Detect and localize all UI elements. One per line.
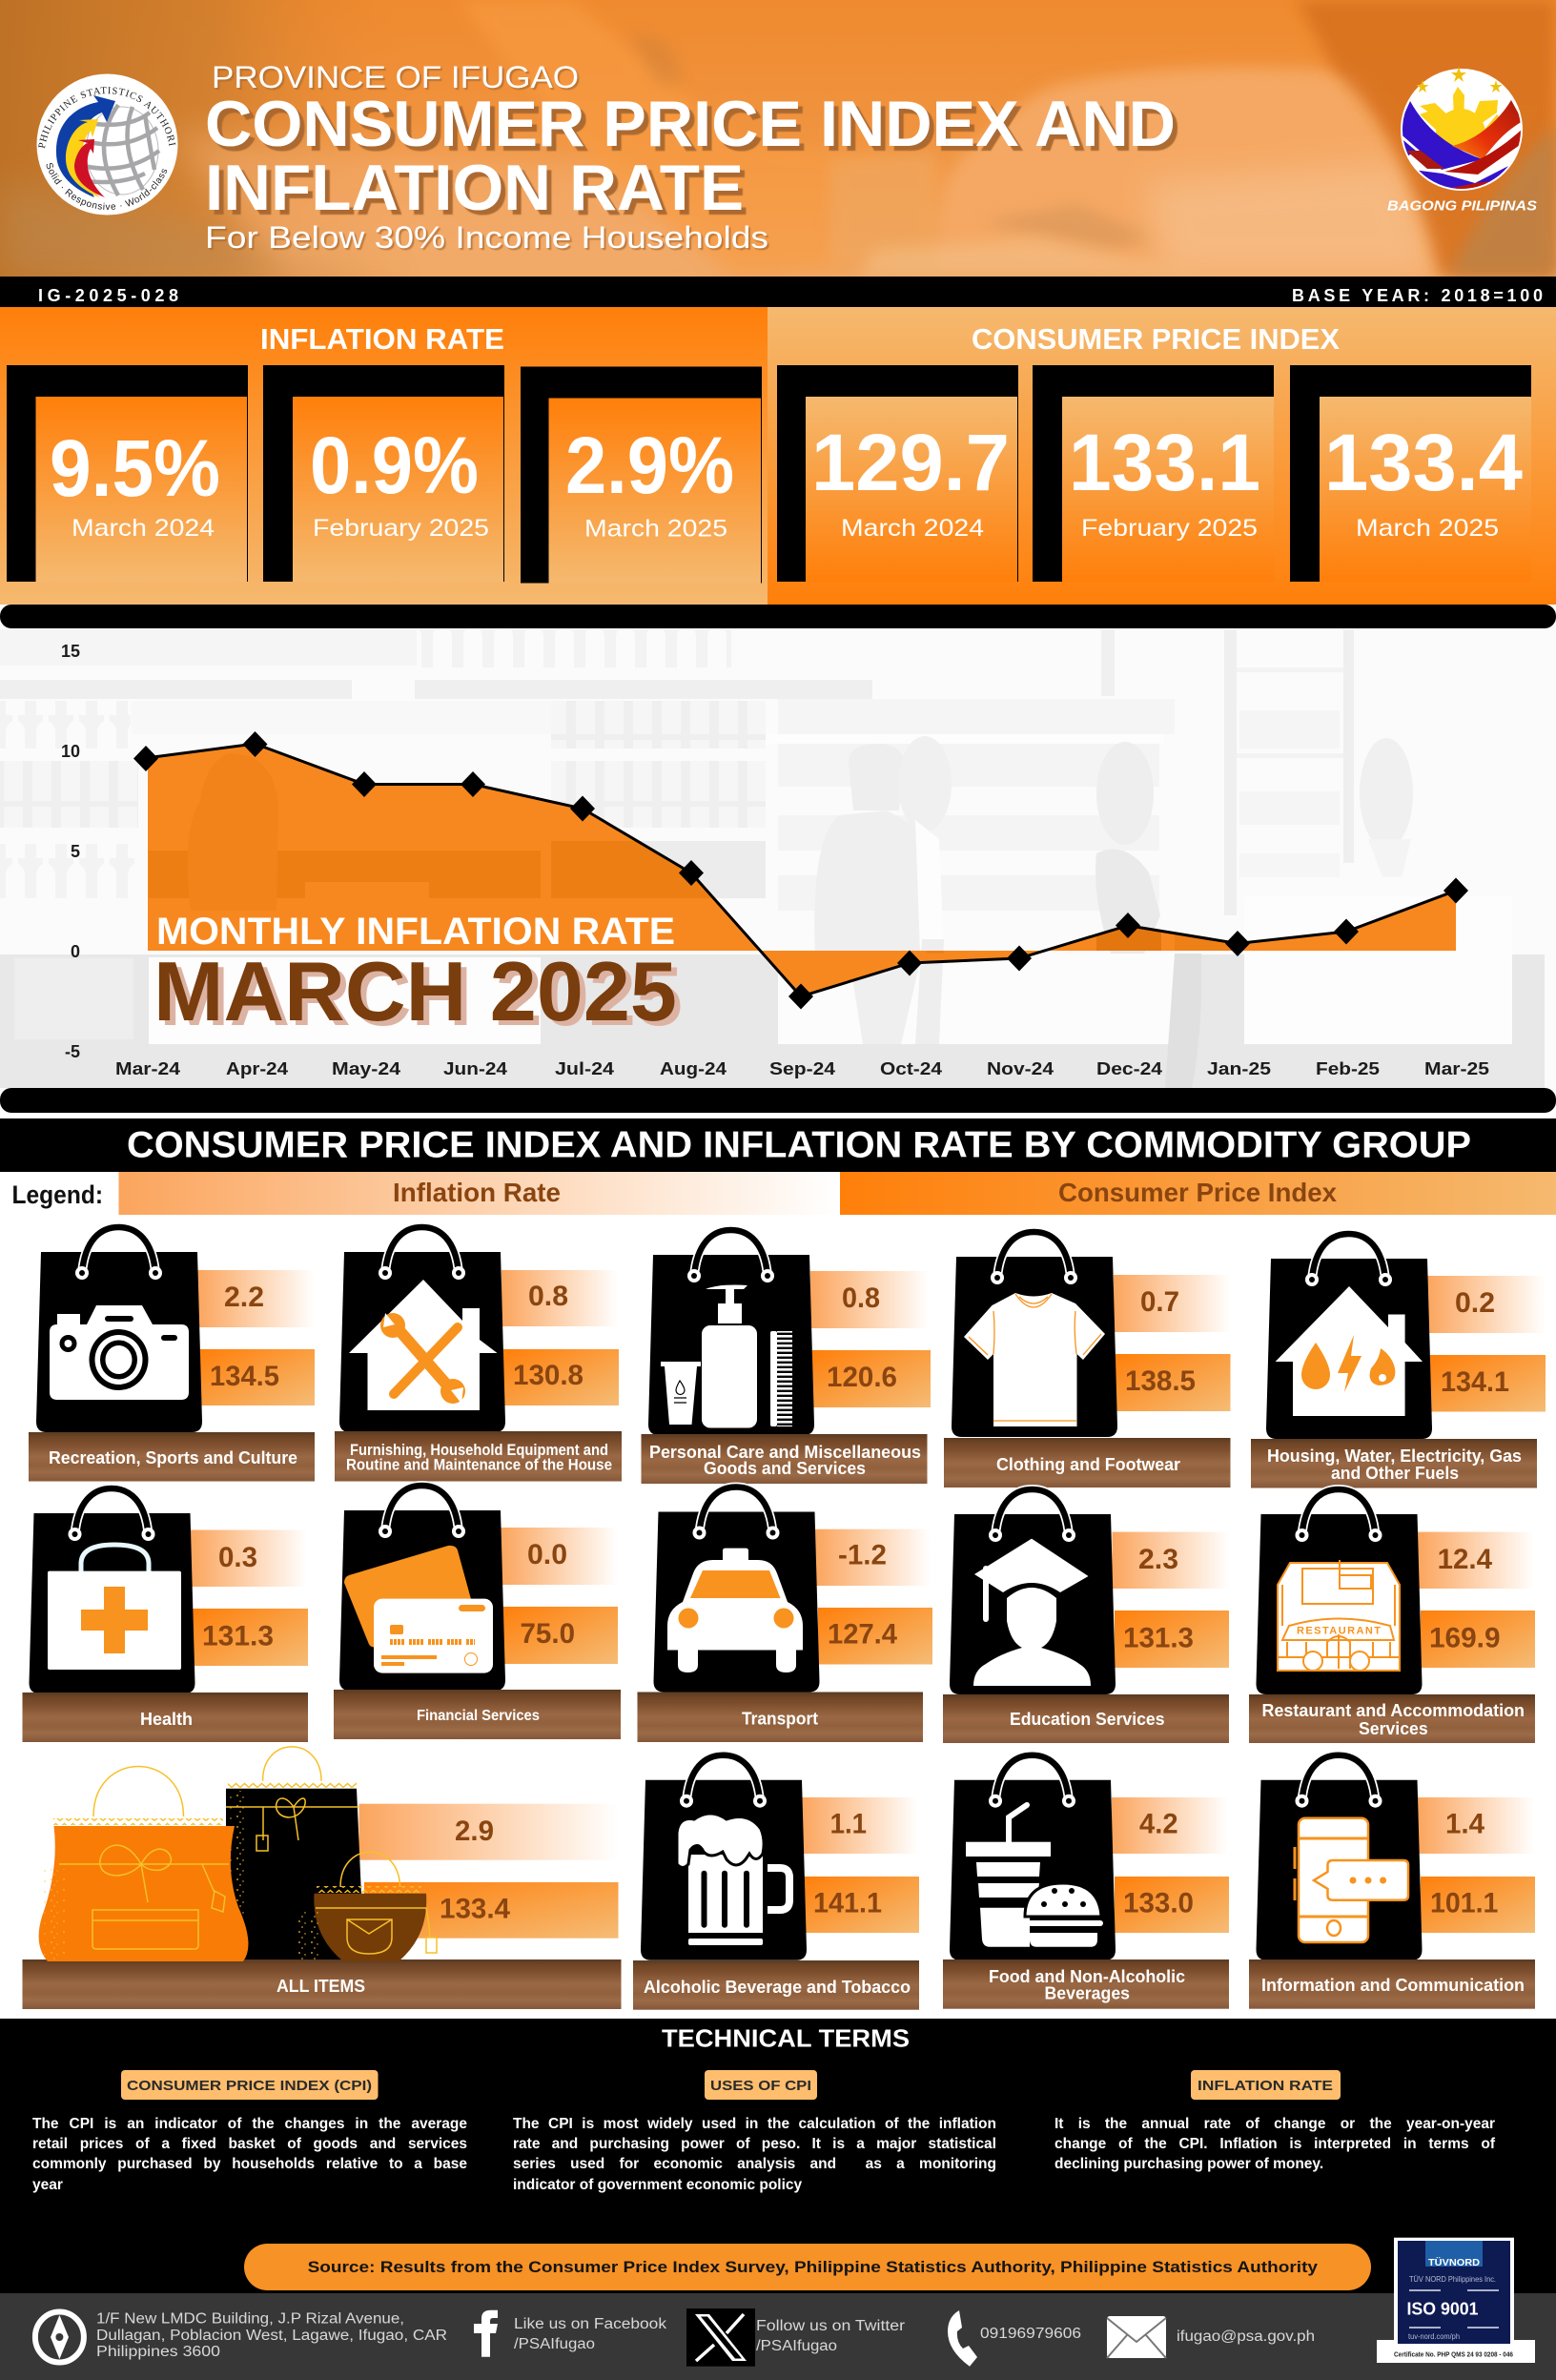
- right shelves: [1101, 629, 1115, 696]
- item: financial services: 0.0: [527, 1539, 567, 1570]
- item: food and non-alcoholic beverages: [943, 1755, 1229, 2009]
- item: furnishing, household equipment: 0.8: [528, 1281, 568, 1312]
- item: housing, water, electricity: Housing, Water, Electricity, Gas: [1267, 1446, 1522, 1466]
- y axis: 0: [71, 942, 80, 961]
- item: furnishing, household equipment: 130.8: [513, 1360, 584, 1391]
- x axis: Jun-24: [443, 1059, 507, 1078]
- item: restaurant and accommodation: Restaurant and Accommodation: [1262, 1700, 1525, 1720]
- term label: CPI: [121, 2070, 378, 2100]
- card: March 2025: March 2025: [1356, 515, 1499, 542]
- card: March 2024: 129.7: [811, 418, 1010, 507]
- card: March 2024: 9.5%: [50, 423, 220, 513]
- heading: CONSUMER PRICE INDEX: [972, 322, 1340, 356]
- y axis: 15: [61, 642, 80, 661]
- icon: camera: [50, 1305, 189, 1400]
- item: personal care: Personal Care and Miscellaneous: [649, 1442, 921, 1462]
- item: information and communication: 1.4: [1445, 1809, 1484, 1840]
- panel: inflation rate: [0, 307, 768, 605]
- text: CPI definition: The CPI is an indicator of the changes in the average: [32, 2116, 467, 2132]
- item: recreation, sports and culture: Recreation, Sports and Culture: [49, 1447, 297, 1467]
- y axis: 5: [71, 842, 80, 861]
- icon: taxi: [667, 1549, 803, 1672]
- contact: facebook: [474, 2310, 666, 2357]
- term label: uses of CPI: USES OF CPI: [710, 2078, 811, 2094]
- card: March 2025: 2.9%: [565, 421, 734, 510]
- y axis: 10: [61, 742, 80, 761]
- store background behind chart: [0, 625, 1556, 1092]
- white counters: [149, 957, 541, 1044]
- card: March 2025: [1290, 365, 1531, 582]
- footer band: [0, 2293, 1556, 2380]
- text: uses of CPI: rate and purchasing power of peso. It is a major statistical: [513, 2136, 996, 2152]
- x axis: Mar-24: [115, 1059, 180, 1078]
- card: February 2025: 133.1: [1069, 418, 1260, 507]
- icon: graduate: [973, 1539, 1091, 1686]
- logo: Philippine Statistics Authority: Solid · Responsive · World-class: [46, 162, 168, 210]
- text: uses of CPI: [513, 2116, 996, 2193]
- heading: TECHNICAL TERMS: [662, 2023, 910, 2052]
- item: education services: 2.3: [1138, 1544, 1178, 1575]
- legend: consumer price index: [840, 1172, 1556, 1215]
- item: recreation, sports and culture: 2.2: [224, 1282, 264, 1313]
- x axis: Apr-24: [226, 1059, 288, 1078]
- contact: email: [1107, 2316, 1315, 2358]
- term label: inflation rate: [1191, 2070, 1341, 2100]
- icon: t-shirt: [964, 1293, 1105, 1426]
- top shelf: [0, 629, 417, 666]
- text: uses of CPI: The CPI is most widely used in the calculation of the inflation: [513, 2116, 996, 2132]
- icon: phone: [948, 2310, 977, 2367]
- item: education services: [943, 1489, 1229, 1743]
- icon: beer mug: [677, 1814, 789, 1945]
- legend: inflation rate: Inflation Rate: [393, 1178, 561, 1207]
- item: furnishing, household equipment: Furnishing, Household Equipment and: [350, 1442, 608, 1459]
- item: personal care: Goods and Services: [704, 1458, 866, 1478]
- text: inflation rate definition: declining purchasing power of money.: [1054, 2156, 1323, 2172]
- item: restaurant and accommodation: 169.9: [1429, 1623, 1501, 1654]
- text: CPI definition: year: [32, 2177, 63, 2193]
- item: personal care: 0.8: [842, 1282, 880, 1314]
- card: March 2025: 133.4: [1324, 418, 1523, 507]
- y axis: -5: [65, 1042, 80, 1061]
- item: transport: 127.4: [828, 1619, 897, 1650]
- item: restaurant and accommodation: 12.4: [1438, 1544, 1492, 1575]
- legend: consumer price index: Consumer Price Index: [1058, 1178, 1337, 1207]
- title block: [205, 60, 1176, 255]
- item: health: 131.3: [202, 1621, 274, 1652]
- item: information and communication: Information and Communication: [1261, 1975, 1525, 1995]
- text: uses of CPI: indicator of government economic policy: [513, 2177, 802, 2193]
- source pill: Source: Results from the Consumer Price Index Survey, Philippine Statistics Authority, Philippine Statistics Authority: [308, 2258, 1319, 2276]
- item: alcoholic beverage and tobacco: 1.1: [830, 1809, 867, 1840]
- item: all items: 133.4: [440, 1894, 510, 1925]
- divider bars: [0, 605, 1556, 1113]
- contact: facebook: /PSAIfugao: [514, 2336, 595, 2352]
- contact: twitter: Follow us on Twitter: [756, 2318, 905, 2334]
- text: uses of CPI: series used for economic analysis and as a monitoring: [513, 2156, 996, 2172]
- icon: house with tools: [349, 1280, 498, 1410]
- item: health: 0.3: [218, 1542, 257, 1573]
- panel: consumer price index: [768, 307, 1556, 605]
- badge: ISO 9001: tuv-nord.com/ph: [1408, 2332, 1460, 2341]
- item: education services: Education Services: [1010, 1709, 1165, 1729]
- main title: [205, 88, 1176, 224]
- icon: house with utilities: [1276, 1286, 1423, 1416]
- markers: [133, 731, 1468, 1009]
- card: March 2024: [777, 365, 1018, 582]
- card: February 2025: February 2025: [313, 515, 489, 542]
- contact: address: Dullagan, Poblacion West, Lagawe, Ifugao, CAR: [96, 2328, 447, 2344]
- card: March 2024: March 2024: [841, 515, 984, 542]
- term label: inflation rate: INFLATION RATE: [1198, 2078, 1333, 2094]
- left shelves: [0, 701, 131, 749]
- main title: INFLATION RATE: [205, 152, 744, 224]
- icon: black gift bag: [226, 1747, 364, 1959]
- legend: [11, 1172, 1556, 1215]
- item: recreation, sports and culture: 134.5: [210, 1361, 279, 1392]
- line and area chart: monthly inflation rate: [61, 642, 1489, 1078]
- item: recreation, sports and culture: [29, 1227, 315, 1482]
- legend: Legend:: [11, 1180, 103, 1209]
- item: information and communication: 101.1: [1430, 1888, 1498, 1919]
- item: furnishing, household equipment: Routine and Maintenance of the House: [346, 1457, 612, 1474]
- text: CPI definition: [32, 2116, 467, 2193]
- item: restaurant and accommodation: Services: [1359, 1718, 1428, 1738]
- item: transport: Transport: [742, 1709, 818, 1728]
- badge: ISO 9001: TÜVNORD: [1428, 2256, 1480, 2268]
- icon: X: [686, 2308, 755, 2367]
- central display: [778, 699, 1175, 734]
- item: financial services: Financial Services: [417, 1708, 540, 1724]
- term label: uses of CPI: [705, 2070, 817, 2100]
- contact: twitter: [686, 2308, 905, 2367]
- item: food and non-alcoholic beverages: Food and Non-Alcoholic: [989, 1966, 1185, 1986]
- item: clothing and footwear: 0.7: [1140, 1286, 1179, 1318]
- badge: ISO 9001: ISO 9001: [1407, 2300, 1478, 2319]
- icon: bank cards: [344, 1546, 493, 1673]
- x axis: Jan-25: [1207, 1059, 1271, 1078]
- heading: INFLATION RATE: [260, 322, 504, 356]
- card: March 2025: March 2025: [584, 515, 727, 542]
- reference bar: IG-2025-028: [38, 286, 178, 305]
- floor: [0, 954, 1545, 1088]
- item: clothing and footwear: Clothing and Footwear: [996, 1454, 1180, 1474]
- people: [849, 744, 904, 810]
- header banner: [0, 0, 1556, 277]
- badge: ISO 9001: [1377, 2238, 1535, 2363]
- x axis: May-24: [332, 1059, 400, 1078]
- badge: ISO 9001: TÜV NORD Philippines Inc.: [1409, 2274, 1496, 2284]
- reference bar: BASE YEAR: 2018=100: [1292, 286, 1543, 305]
- x axis: Sep-24: [769, 1059, 835, 1078]
- icon: compass: [35, 2311, 84, 2363]
- panel: technical terms: [0, 2019, 1556, 2293]
- chart title: monthly inflation rate: MONTHLY INFLATION RATE: [156, 911, 675, 953]
- card: February 2025: [263, 365, 504, 582]
- x axis: Mar-25: [1424, 1059, 1489, 1078]
- text: CPI definition: retail prices of a fixed basket of goods and services: [32, 2136, 467, 2152]
- x axis: Nov-24: [987, 1059, 1054, 1078]
- stars: [1417, 67, 1503, 92]
- contact: phone: [948, 2310, 1081, 2367]
- icon: medical kit: [48, 1545, 181, 1670]
- logo: Bagong Pilipinas: [1387, 67, 1537, 214]
- item: health: [23, 1488, 308, 1742]
- middle shelves: [132, 701, 551, 734]
- icon: drink and burger: [966, 1805, 1103, 1947]
- item: alcoholic beverage and tobacco: [633, 1755, 919, 2010]
- item: clothing and footwear: 138.5: [1125, 1365, 1196, 1397]
- main title: CONSUMER PRICE INDEX AND: [205, 88, 1176, 160]
- icon: orange gift bag: [39, 1766, 248, 1961]
- x axis: Oct-24: [880, 1059, 942, 1078]
- item: furnishing, household equipment: [335, 1227, 622, 1482]
- item: personal care: 120.6: [827, 1362, 897, 1393]
- reference bar: [0, 277, 1556, 307]
- contact: address: [35, 2311, 447, 2363]
- item: alcoholic beverage and tobacco: Alcoholic Beverage and Tobacco: [644, 1977, 911, 1997]
- card: February 2025: [1033, 365, 1274, 582]
- card: March 2024: [7, 365, 248, 582]
- logo: Philippine Statistics Authority: [36, 74, 177, 215]
- text: inflation rate definition: It is the annual rate of change or the year-on-year: [1054, 2116, 1495, 2132]
- item: housing, water, electricity: 0.2: [1455, 1287, 1495, 1319]
- item: all items: [23, 1747, 622, 2009]
- text: inflation rate definition: [1054, 2116, 1495, 2172]
- area fill: [148, 744, 1456, 996]
- item: clothing and footwear: [944, 1232, 1230, 1488]
- card: February 2025: 0.9%: [310, 421, 479, 510]
- heading: commodity group: [0, 1118, 1556, 1172]
- contact: address: 1/F New LMDC Building, J.P Rizal Avenue,: [96, 2311, 404, 2328]
- card: March 2025: [521, 366, 762, 584]
- source pill: [244, 2244, 1371, 2290]
- icon: smartphone with chat bubble: [1295, 1818, 1408, 1942]
- item: transport: [637, 1488, 932, 1742]
- line: [146, 744, 1456, 996]
- heading: commodity group: CONSUMER PRICE INDEX AND INFLATION RATE BY COMMODITY GROUP: [127, 1125, 1471, 1165]
- item: food and non-alcoholic beverages: 4.2: [1139, 1809, 1178, 1840]
- subtitle: For Below 30% Income Households: [205, 220, 768, 255]
- contact: address: Philippines 3600: [96, 2344, 220, 2360]
- item: financial services: 75.0: [521, 1618, 575, 1650]
- x axis: Aug-24: [660, 1059, 727, 1078]
- y axis: [61, 642, 80, 1061]
- term label: CPI: CONSUMER PRICE INDEX (CPI): [127, 2078, 372, 2094]
- legend: inflation rate: [118, 1172, 840, 1215]
- icon: restaurant building: [1278, 1560, 1400, 1671]
- item: all items: ALL ITEMS: [276, 1976, 365, 1996]
- item: all items: 2.9: [455, 1816, 494, 1847]
- x axis: Jul-24: [555, 1059, 614, 1078]
- item: personal care: [641, 1230, 931, 1484]
- item: food and non-alcoholic beverages: Beverages: [1045, 1983, 1130, 2003]
- item: housing, water, electricity: and Other Fuels: [1331, 1463, 1459, 1483]
- item: health: Health: [140, 1709, 193, 1729]
- item: food and non-alcoholic beverages: 133.0: [1123, 1888, 1194, 1919]
- item: transport: -1.2: [838, 1540, 887, 1571]
- darker reflected shelves: [149, 841, 1232, 954]
- card: March 2024: March 2024: [72, 515, 215, 542]
- item: alcoholic beverage and tobacco: 141.1: [813, 1888, 882, 1919]
- logo: Bagong Pilipinas: BAGONG PILIPINAS: [1387, 198, 1537, 214]
- item: education services: 131.3: [1123, 1623, 1194, 1654]
- x axis: Dec-24: [1096, 1059, 1162, 1078]
- item: information and communication: [1249, 1755, 1535, 2009]
- chart title: March 2025: MARCH 2025: [154, 944, 677, 1038]
- icon: brown gift bag: [297, 1852, 437, 1961]
- x axis: [115, 1059, 1489, 1078]
- badge: ISO 9001: Certificate No. PHP QMS 24 93 0208 - 046: [1394, 2349, 1513, 2359]
- icon: restaurant building: RESTAURANT: [1297, 1625, 1381, 1636]
- item: financial services: [334, 1486, 621, 1739]
- card: February 2025: February 2025: [1081, 515, 1258, 542]
- icon: envelope: [1107, 2316, 1166, 2358]
- text: CPI definition: commonly purchased by households relative to a base: [32, 2156, 467, 2172]
- icon: toiletries: [661, 1285, 792, 1428]
- contact: twitter: /PSAIfugao: [756, 2338, 837, 2354]
- item: restaurant and accommodation: [1249, 1489, 1535, 1743]
- icon: facebook: [474, 2310, 498, 2357]
- contact: phone: 09196979606: [980, 2326, 1081, 2342]
- sun: [1420, 87, 1499, 151]
- x axis: Feb-25: [1316, 1059, 1380, 1078]
- contact: facebook: Like us on Facebook: [514, 2316, 666, 2332]
- contact: email: ifugao@psa.gov.ph: [1177, 2329, 1315, 2345]
- province: PROVINCE OF IFUGAO: [212, 60, 579, 94]
- text: inflation rate definition: change of the CPI. Inflation is interpreted in terms of: [1054, 2136, 1495, 2152]
- item: housing, water, electricity: 134.1: [1441, 1366, 1509, 1398]
- item: housing, water, electricity: [1251, 1234, 1546, 1488]
